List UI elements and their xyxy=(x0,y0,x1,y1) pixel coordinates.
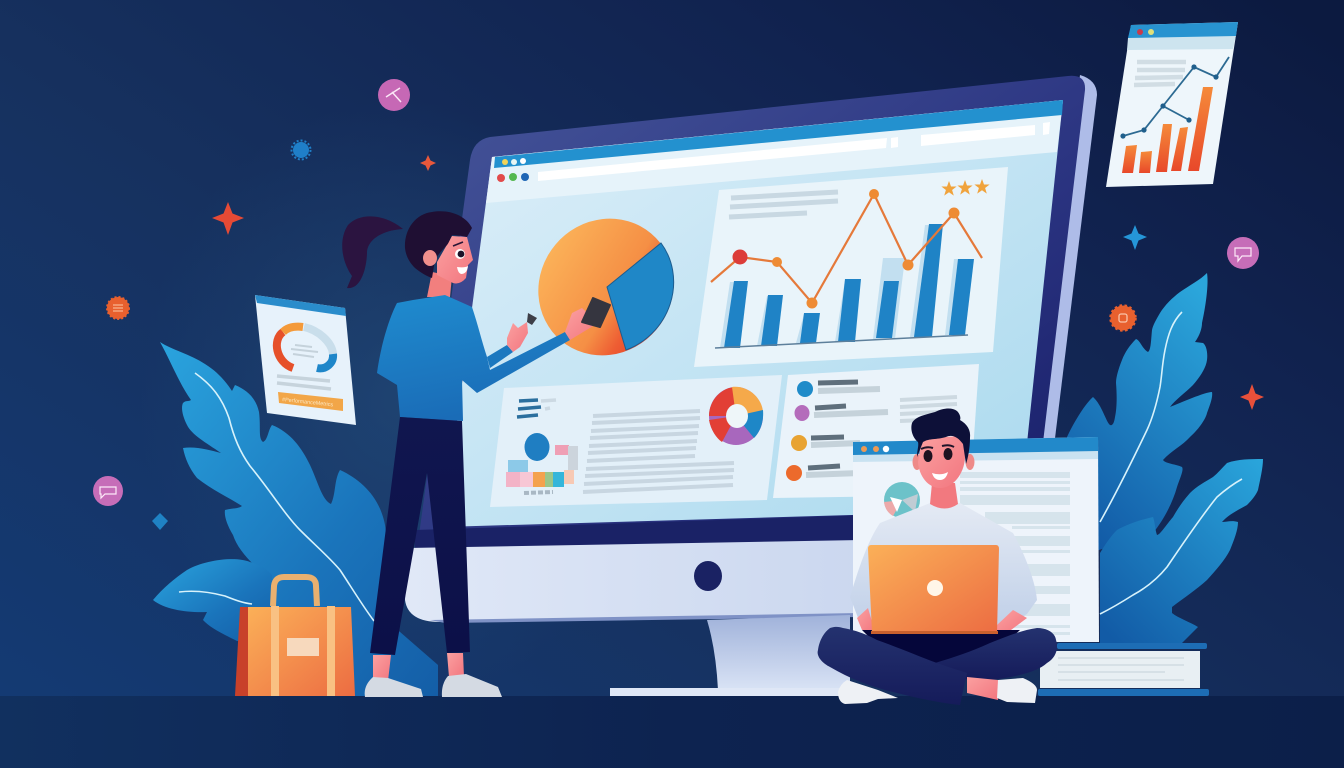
smile xyxy=(457,266,468,274)
monitor base xyxy=(610,688,850,696)
chart bars xyxy=(724,224,974,348)
ears xyxy=(912,454,974,470)
ponytail xyxy=(342,216,403,288)
bag side xyxy=(235,607,250,696)
left leaves xyxy=(153,342,438,696)
right shoe xyxy=(997,678,1037,703)
monitor side edge xyxy=(1015,75,1097,520)
card light band xyxy=(1127,35,1236,50)
small device xyxy=(527,313,537,325)
ankles xyxy=(373,653,464,681)
card text lines xyxy=(1134,62,1186,85)
panel background xyxy=(490,375,782,507)
left hand xyxy=(507,322,528,352)
chart axis xyxy=(715,335,968,348)
face xyxy=(918,436,965,488)
chart heading lines xyxy=(729,192,838,217)
bag handle xyxy=(273,577,317,606)
right leaves xyxy=(1067,273,1263,643)
monitor stand xyxy=(707,615,850,690)
address bars xyxy=(538,122,1050,181)
list bullets xyxy=(786,381,813,481)
trend line xyxy=(711,194,982,303)
phone xyxy=(582,298,610,327)
stack of books xyxy=(1038,643,1209,696)
monitor bezel xyxy=(417,76,1085,550)
eyes and brows xyxy=(921,445,954,462)
upper right leaf xyxy=(1067,273,1212,560)
laptop lip xyxy=(871,631,998,634)
side lines xyxy=(900,397,957,421)
lower right list panel xyxy=(773,364,979,498)
large left leaf xyxy=(160,342,438,696)
list descriptions xyxy=(806,389,888,475)
window light band xyxy=(853,449,1098,462)
pie orange slice xyxy=(510,191,702,383)
window title bar xyxy=(853,437,1098,455)
lap shadow xyxy=(862,630,1020,667)
lower right leaf xyxy=(1100,459,1263,643)
window text rows xyxy=(960,472,1070,635)
icon: red sparkle xyxy=(212,202,244,235)
bag label xyxy=(287,638,319,656)
icon: blue gear xyxy=(292,140,310,160)
orange label xyxy=(278,392,343,411)
shopping bag xyxy=(235,577,355,696)
laptop xyxy=(868,545,999,634)
card dots xyxy=(1137,29,1154,35)
right leaf veins xyxy=(1100,312,1242,614)
ear xyxy=(423,250,437,266)
card orange bars xyxy=(1122,87,1213,173)
chart ghost bars xyxy=(720,225,962,348)
icon: orange gear badge xyxy=(107,297,129,319)
screen xyxy=(443,100,1063,527)
sweater xyxy=(850,503,1037,632)
pie chart xyxy=(510,191,702,383)
right hand xyxy=(565,308,598,340)
colored heat blocks xyxy=(506,445,578,487)
monitor chin xyxy=(405,537,1030,622)
panel background xyxy=(773,364,979,498)
icon: red sparkle right xyxy=(1240,384,1264,410)
ear and face xyxy=(437,236,473,283)
pie blue slice xyxy=(607,243,674,350)
right leg xyxy=(935,628,1057,680)
hands xyxy=(857,608,1027,633)
label text: #PerformanceMetrics xyxy=(282,397,334,408)
chart panel background xyxy=(694,167,1008,367)
woman presenting xyxy=(342,211,610,697)
window body xyxy=(853,437,1099,642)
icon: blue diamond xyxy=(152,513,168,530)
left floating report card xyxy=(255,295,356,425)
card header xyxy=(255,295,346,316)
icon: orange gear badge right xyxy=(1110,306,1136,330)
donut chart xyxy=(709,387,763,445)
browser window behind man xyxy=(853,437,1099,642)
card body xyxy=(1106,22,1238,187)
trend points xyxy=(732,189,960,308)
neck xyxy=(930,483,958,508)
bag straps xyxy=(271,606,335,696)
laptop lid xyxy=(868,545,999,633)
list titles xyxy=(808,382,858,468)
icon: pink chat badge xyxy=(93,476,123,506)
blue blob xyxy=(524,433,550,461)
hair xyxy=(405,211,472,278)
icon: small red sparkle xyxy=(420,155,436,171)
card trend line xyxy=(1120,57,1229,139)
monitor chin shadow edge xyxy=(430,613,860,623)
laptop logo xyxy=(927,580,943,596)
left leg xyxy=(818,627,967,705)
book pages xyxy=(1040,651,1200,688)
monitor xyxy=(405,75,1097,696)
small labels xyxy=(524,492,553,493)
icon: pink tool badge xyxy=(378,79,410,111)
left shoe xyxy=(838,680,898,704)
monitor bottom band xyxy=(415,510,1030,549)
man with laptop xyxy=(818,408,1057,705)
book bottom cover xyxy=(1038,689,1209,696)
small pie chart xyxy=(884,482,920,518)
line and bar chart panel xyxy=(694,167,1008,367)
card text lines xyxy=(277,376,331,389)
card header xyxy=(1128,22,1238,38)
legend bars xyxy=(517,400,556,417)
window dots xyxy=(861,446,889,452)
top right floating chart card xyxy=(1106,22,1238,187)
browser toolbar xyxy=(486,100,1063,203)
text lines xyxy=(583,411,734,492)
shirt and arm xyxy=(377,295,570,421)
icon: blue sparkle xyxy=(1123,225,1147,250)
book top cover xyxy=(1057,643,1207,649)
gauge chart xyxy=(277,327,333,368)
rating stars xyxy=(941,179,990,196)
eye xyxy=(453,242,465,259)
browser window dots xyxy=(497,158,529,182)
bag body xyxy=(248,607,355,696)
book page lines xyxy=(1058,658,1184,680)
neck xyxy=(427,272,452,297)
icon: pink chat badge right xyxy=(1227,237,1259,269)
back arm xyxy=(487,345,513,368)
shoes xyxy=(365,674,502,697)
leaf veins xyxy=(179,373,374,621)
lower left dashboard panel xyxy=(490,375,782,507)
monitor button xyxy=(694,561,722,591)
hair xyxy=(911,408,970,464)
background glow xyxy=(140,100,660,700)
smile xyxy=(932,472,948,480)
floor xyxy=(0,696,1344,768)
pants xyxy=(370,417,470,655)
card body xyxy=(255,295,356,425)
right ankle xyxy=(967,677,998,700)
small left leaf xyxy=(153,559,272,641)
floating icons xyxy=(93,79,1264,530)
browser title bar xyxy=(494,100,1063,168)
gauge text xyxy=(291,345,318,357)
